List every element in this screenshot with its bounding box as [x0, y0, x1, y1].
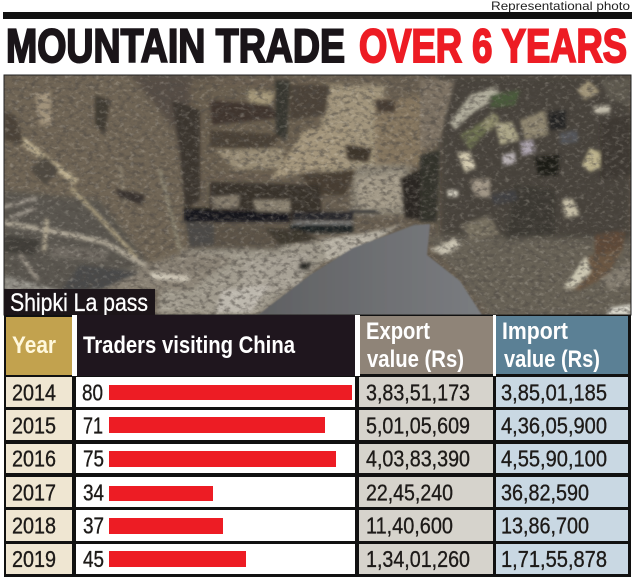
top rule	[3, 12, 632, 19]
centre strata	[210, 100, 280, 125]
row 2017: 36,82,590	[501, 480, 589, 506]
table header: value (Rs)	[504, 346, 600, 373]
row 2019: 1,34,01,260	[366, 546, 470, 572]
rock texture	[4, 75, 631, 315]
table header: Traders visiting China	[83, 332, 296, 359]
title	[6, 19, 627, 72]
title: MOUNTAIN TRADE	[6, 19, 345, 72]
table header: Export	[366, 318, 430, 345]
table	[4, 315, 631, 577]
row 2014: 3,85,01,185	[501, 380, 607, 406]
row 2018	[6, 510, 628, 541]
boulder	[574, 248, 622, 290]
row 2014	[6, 377, 628, 407]
dark shadow line	[184, 209, 290, 222]
row 2015	[6, 410, 628, 440]
row 2019: 1,71,55,878	[501, 546, 607, 572]
broad tonal areas	[4, 75, 631, 315]
caption: Shipki La pass: Shipki La pass	[10, 289, 148, 317]
row 2015: 4,36,05,900	[501, 412, 607, 438]
row 2015: 71	[83, 412, 103, 438]
row 2014: 2014	[12, 380, 56, 406]
row 2015: 2015	[12, 412, 56, 438]
overhang	[210, 182, 322, 222]
row 2017	[6, 477, 628, 507]
light rubble beside the road	[325, 222, 405, 262]
row 2016: 4,55,90,100	[501, 446, 607, 472]
row 2017: 22,45,240	[366, 480, 453, 506]
row 2018: 2018	[12, 512, 56, 538]
table header: value (Rs)	[367, 346, 464, 373]
shadow gully left of centre	[172, 100, 200, 210]
left cliff veins	[20, 136, 79, 186]
road	[258, 224, 482, 315]
row 2016	[6, 444, 628, 473]
row 2016: 2016	[12, 446, 56, 472]
row 2016: 75	[83, 446, 104, 472]
row 2017: 2017	[12, 480, 56, 506]
bridge	[293, 212, 353, 221]
row 2019: 2019	[12, 546, 56, 572]
row 2014: 3,83,51,173	[366, 380, 470, 406]
row 2017: 34	[83, 480, 104, 506]
photo: Shipki La pass mountain road	[4, 75, 631, 315]
row 2018: 13,86,700	[501, 512, 589, 538]
row 2016: 4,03,83,390	[366, 446, 470, 472]
row 2015: 5,01,05,609	[366, 412, 470, 438]
right upper slope	[420, 80, 455, 150]
row 2014: 80	[82, 380, 103, 406]
row 2019: 45	[83, 546, 104, 572]
table header: Import	[502, 318, 568, 345]
table header	[6, 315, 628, 376]
row 2018: 37	[83, 512, 104, 538]
row 2019	[6, 544, 628, 574]
table header: Year	[12, 332, 56, 359]
row 2018: 11,40,600	[366, 512, 453, 538]
photo border	[4, 75, 631, 315]
